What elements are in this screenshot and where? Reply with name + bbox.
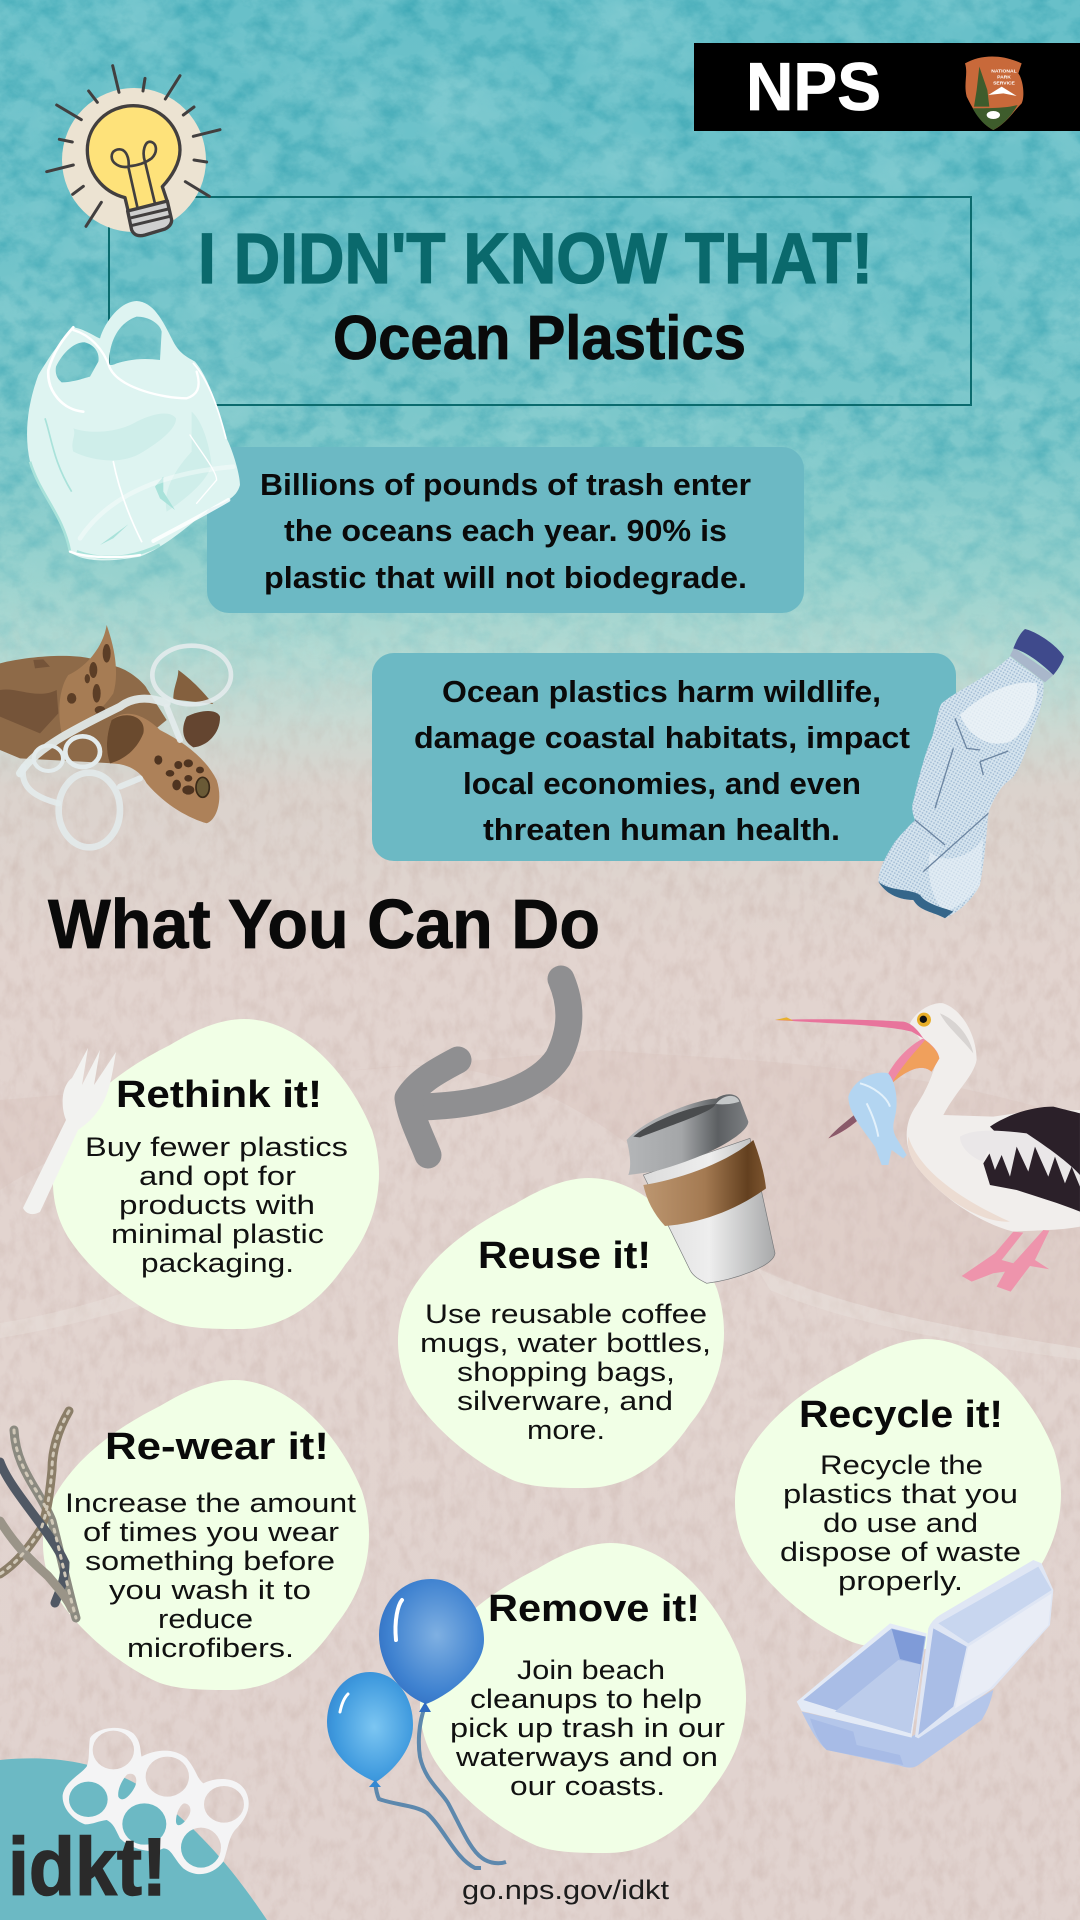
panel: Reuse it: Use reusable coffee — [425, 1299, 707, 1329]
callout: ocean plastics harm: Ocean plastics harm wildlife, — [442, 674, 881, 709]
panel: Recycle it: Recycle the — [820, 1450, 983, 1480]
icon: six-pack rings — [63, 1728, 249, 1874]
panel: Re-wear it — [43, 1380, 369, 1690]
title frame — [109, 197, 971, 405]
icon: turtle in plastic rings — [0, 625, 231, 847]
panel: Reuse it — [398, 1178, 724, 1488]
panel: Recycle it: Recycle it! — [799, 1394, 1003, 1436]
panel: Reuse it: mugs, water bottles, — [420, 1328, 711, 1358]
badge: teal corner — [0, 1758, 267, 1920]
panel: Reuse it: Reuse it! — [478, 1235, 651, 1277]
icon: reusable coffee cup — [627, 1094, 775, 1283]
panel: Remove it: pick up trash in our — [450, 1713, 725, 1743]
callout: ocean plastics harm: damage coastal habitats, impact — [414, 720, 910, 755]
icon: plastic bottle — [878, 629, 1064, 918]
panel: Rethink it: minimal plastic — [111, 1219, 324, 1249]
panel: Rethink it: Buy fewer plastics — [85, 1132, 348, 1162]
icon: plastic bag — [27, 301, 240, 560]
panel: Remove it: our coasts. — [510, 1771, 665, 1801]
icon: plastic fork — [23, 1048, 116, 1214]
subtitle: Ocean Plastics: Ocean Plastics — [333, 304, 746, 373]
icon: light bulb — [47, 66, 220, 236]
heading: What You Can Do: What You Can Do — [48, 885, 600, 963]
arrow: pointing to actions — [408, 979, 569, 1155]
title: I Didn't Know That: I DIDN'T KNOW THAT! — [198, 220, 873, 299]
callout: ocean plastics harm: local economies, and even — [463, 766, 861, 801]
callout: billions of pounds — [207, 447, 804, 613]
panel: Remove it — [420, 1543, 746, 1853]
panel: Rethink it: packaging. — [141, 1248, 294, 1278]
panel: Re-wear it: of times you wear — [83, 1517, 339, 1547]
callout: billions of pounds: Billions of pounds of trash enter — [260, 467, 751, 502]
panel: Rethink it: and opt for — [139, 1161, 296, 1191]
icon: National Park Service arrowhead: NATIONAL — [991, 69, 1017, 75]
icon: pelican with plastic bag — [775, 1003, 1080, 1292]
icon: National Park Service arrowhead: PARK — [997, 75, 1011, 81]
panel: Re-wear it: you wash it to — [109, 1575, 311, 1605]
panel: Re-wear it: Re-wear it! — [105, 1426, 329, 1468]
logo: idkt!: idkt! — [8, 1822, 167, 1913]
panel: Rethink it — [53, 1019, 379, 1329]
panel: Recycle it: properly. — [838, 1566, 963, 1596]
icon: blue balloons — [327, 1579, 506, 1868]
NPS banner — [694, 43, 1080, 131]
panel: Reuse it: more. — [527, 1415, 605, 1445]
panel: Recycle it — [735, 1339, 1061, 1649]
panel: Remove it: Remove it! — [488, 1588, 700, 1630]
callout: billions of pounds: the oceans each year. 90% is — [284, 513, 727, 548]
panel: Recycle it: dispose of waste — [780, 1537, 1021, 1567]
callout: billions of pounds: plastic that will not biodegrade. — [264, 560, 747, 595]
callout: ocean plastics harm: threaten human health. — [483, 812, 840, 847]
panel: Re-wear it: microfibers. — [127, 1633, 294, 1663]
icon: plastic clamshell container — [797, 1560, 1053, 1768]
panel: Remove it: cleanups to help — [470, 1684, 702, 1714]
footer URL: go.nps.gov/idkt — [462, 1875, 670, 1905]
panel: Remove it: waterways and on — [455, 1742, 718, 1772]
panel: Reuse it: silverware, and — [457, 1386, 673, 1416]
panel: Recycle it: plastics that you — [783, 1479, 1018, 1509]
icon: frayed rope — [0, 1411, 76, 1618]
icon: National Park Service arrowhead — [965, 56, 1023, 130]
icon: National Park Service arrowhead: SERVICE — [993, 81, 1016, 87]
panel: Recycle it: do use and — [823, 1508, 978, 1538]
NPS wordmark: NPS — [746, 49, 881, 125]
panel: Rethink it: Rethink it! — [116, 1074, 322, 1116]
panel: Re-wear it: reduce — [158, 1604, 253, 1634]
panel: Remove it: Join beach — [517, 1655, 665, 1685]
panel: Re-wear it: something before — [85, 1546, 335, 1576]
panel: Reuse it: shopping bags, — [457, 1357, 675, 1387]
panel: Rethink it: products with — [119, 1190, 315, 1220]
panel: Re-wear it: Increase the amount — [65, 1488, 357, 1518]
callout: ocean plastics harm — [372, 653, 956, 861]
